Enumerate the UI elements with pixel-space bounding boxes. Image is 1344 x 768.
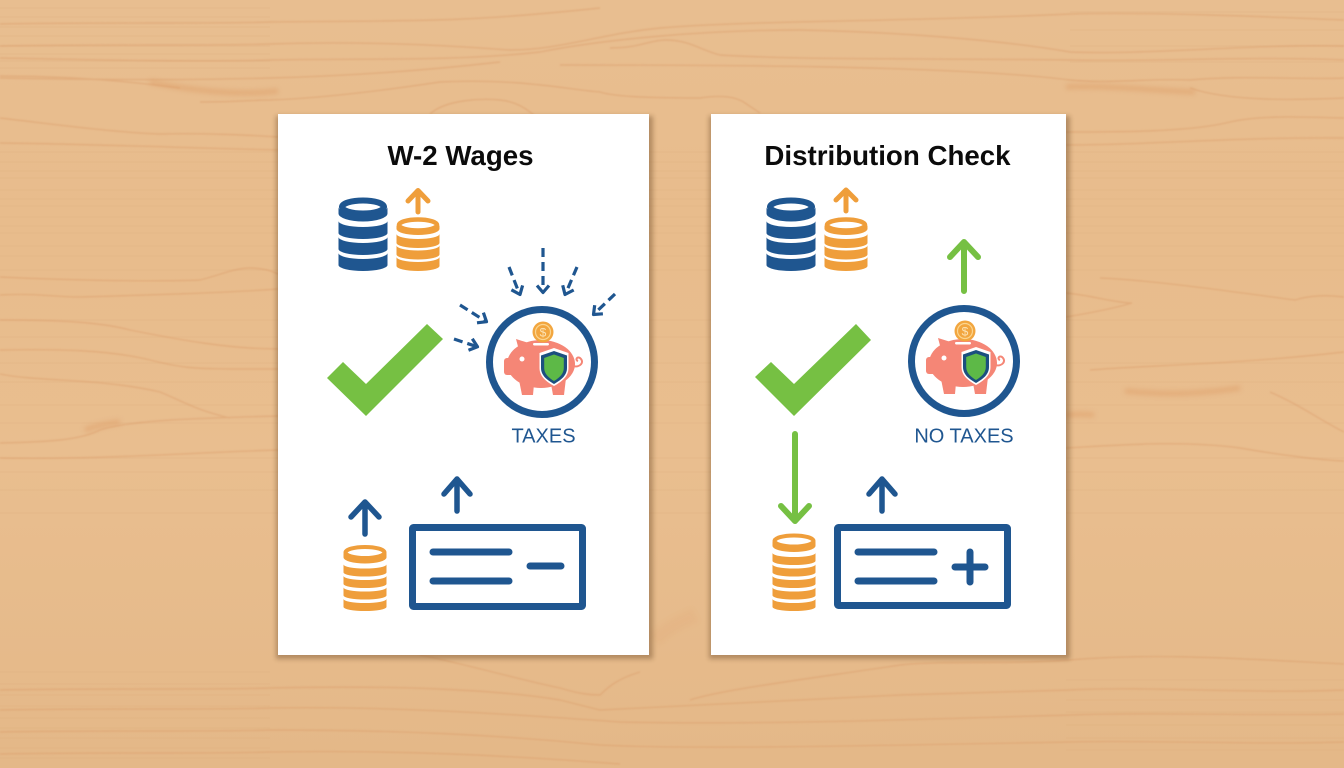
icon: blue coin stack	[338, 200, 388, 271]
panel: W-2 Wages	[276, 114, 653, 659]
piggy body	[504, 339, 582, 395]
icon: orange coin stack tall	[772, 536, 816, 611]
icon: distribution check with plus	[838, 528, 1008, 606]
icon: piggy bank in ring	[912, 308, 1016, 414]
icon: piggy bank in ring	[490, 310, 594, 414]
label: NO TAXES: NO TAXES	[914, 426, 1014, 448]
icon: orange coin stack	[396, 220, 440, 271]
coin: $	[962, 324, 969, 338]
icon: orange coin stack	[824, 220, 868, 271]
arrow: orange up	[408, 190, 428, 212]
label: TAXES: TAXES	[511, 426, 576, 448]
icon: green check mark	[755, 324, 871, 416]
arrows: dashed tax arrows pointing at piggy bank	[454, 248, 615, 350]
arrow: blue up over check	[444, 479, 470, 511]
arrow: green down	[781, 434, 809, 521]
icon: pay check with minus	[412, 528, 582, 606]
panel: Distribution Check	[709, 114, 1070, 659]
heading: W-2 Wages: W-2 Wages	[387, 140, 534, 171]
arrow: orange up	[836, 190, 856, 211]
arrow: green up	[950, 242, 978, 291]
shield	[962, 347, 990, 385]
icon: blue coin stack	[766, 200, 816, 271]
shield	[540, 348, 568, 386]
piggy body	[926, 338, 1004, 394]
coin: $	[540, 326, 547, 340]
heading: Distribution Check: Distribution Check	[764, 140, 1011, 171]
icon: orange coin stack low	[344, 547, 386, 611]
icon: green check mark	[327, 324, 443, 416]
arrow: blue up over check	[869, 479, 895, 511]
arrow: blue up over coins	[351, 502, 379, 534]
